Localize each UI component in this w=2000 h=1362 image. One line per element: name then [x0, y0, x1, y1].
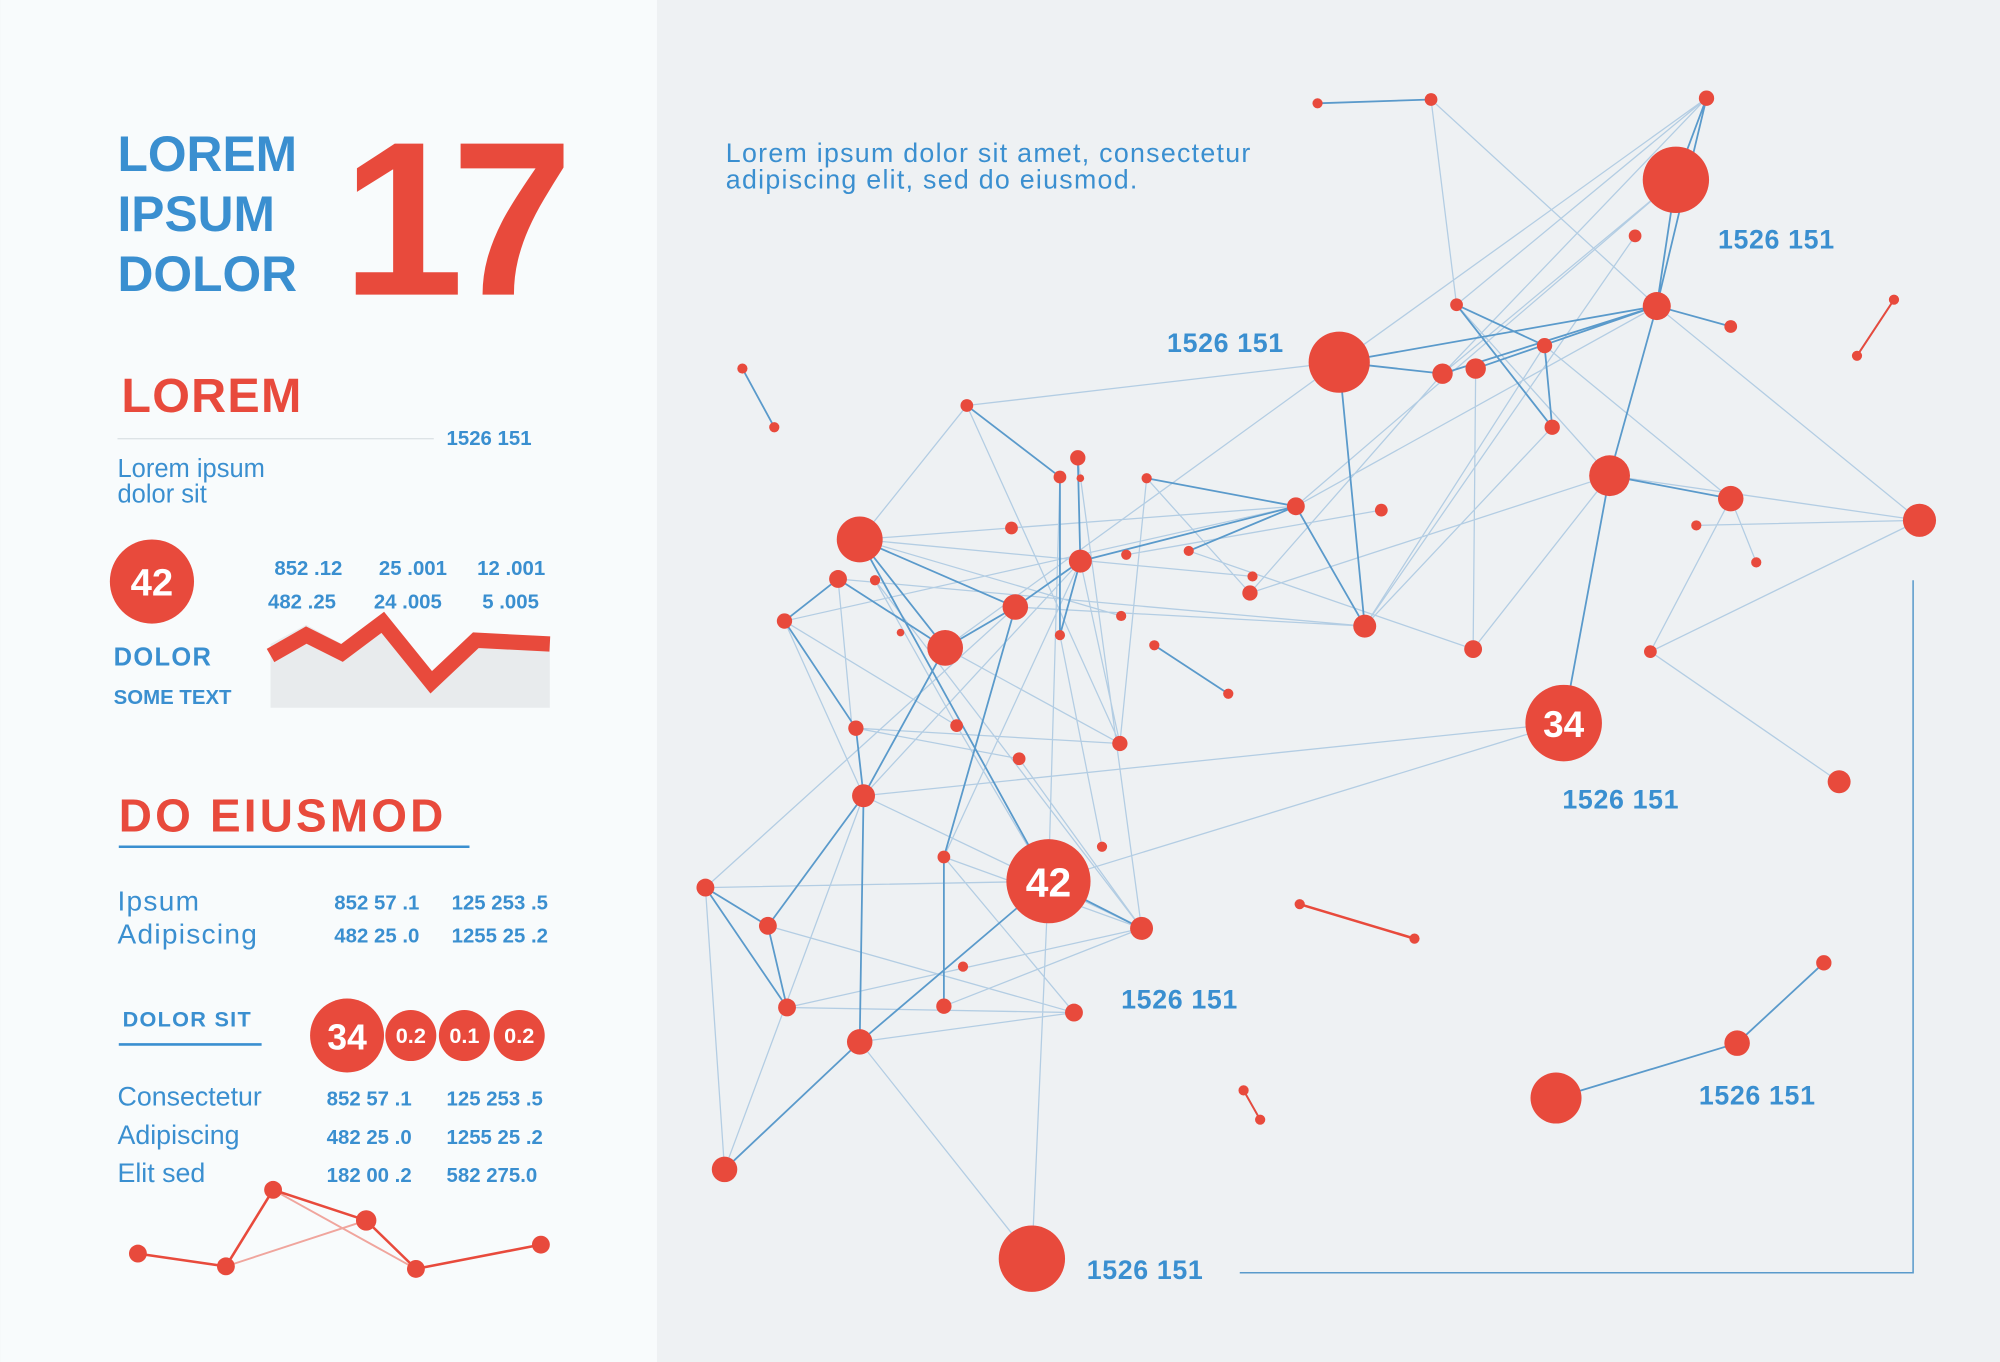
numbers table 3 [327, 1089, 543, 1187]
panel: left sidebar [0, 0, 657, 1362]
numbers table 2 [334, 892, 548, 947]
numbers table 2: 1255 25 .2 [452, 925, 548, 947]
badge: 42 [1006, 839, 1091, 923]
numbers table 3: 482 25 .0 [327, 1127, 412, 1149]
numbers table 3: 182 00 .2 [327, 1165, 412, 1187]
numbers table 1: 5 .005 [482, 591, 539, 613]
node value labels: 1526 151 [1167, 328, 1284, 358]
line chart [129, 1181, 550, 1278]
text block: consectetur list [118, 1082, 262, 1188]
heading: do eiusmod: DO EIUSMOD [119, 789, 447, 841]
node value labels: 1526 151 [1121, 985, 1238, 1015]
numbers table 1: 12 .001 [477, 558, 545, 580]
label: dolor some text [114, 644, 232, 709]
numbers table 2: 852 57 .1 [334, 892, 419, 914]
text block: intro [726, 138, 1252, 195]
node value labels: 1526 151 [1718, 225, 1835, 255]
title: DOLOR [118, 246, 297, 302]
title [118, 126, 297, 302]
numbers table 3: 1255 25 .2 [447, 1127, 543, 1149]
text block: consectetur list: Elit sed [118, 1158, 205, 1188]
badges row: 0.1 [449, 1023, 479, 1048]
area chart [271, 616, 550, 708]
numbers table 1: 482 .25 [268, 591, 336, 613]
badges row: 0.2 [396, 1023, 426, 1048]
numbers table 1: 25 .001 [379, 558, 447, 580]
node value labels: 1526 151 [1087, 1255, 1203, 1285]
bracket line [1240, 580, 1913, 1273]
node value labels [1087, 225, 1835, 1285]
label: dolor some text: DOLOR [114, 644, 212, 672]
node value labels: 1526 151 [1562, 785, 1679, 815]
big number 17: 17 [342, 97, 564, 342]
label: dolor sit: DOLOR SIT [123, 1007, 252, 1032]
badges row [310, 999, 545, 1073]
numbers table 3: 582 275.0 [447, 1165, 537, 1187]
text block: consectetur list: Adipiscing [118, 1120, 240, 1150]
numbers table 3: 852 57 .1 [327, 1089, 412, 1111]
badges row: 0.2 [504, 1023, 534, 1048]
title: LOREM [118, 126, 297, 182]
numbers table 1: 24 .005 [374, 591, 442, 613]
value label: 1526 151 [447, 428, 532, 450]
numbers table 2: 125 253 .5 [452, 892, 548, 914]
badge: 42: 42 [1026, 860, 1071, 906]
node value labels: 1526 151 [1699, 1080, 1816, 1110]
text block: ipsum adipiscing: Adipiscing [118, 919, 258, 950]
badge: 34 [1525, 685, 1602, 761]
text block: ipsum adipiscing: Ipsum [118, 886, 200, 917]
heading: lorem: LOREM [121, 369, 303, 423]
badges row: 34 [327, 1018, 367, 1058]
badge: 34: 34 [1543, 704, 1585, 745]
badge: 42 [110, 539, 194, 624]
numbers table 3: 125 253 .5 [447, 1089, 543, 1111]
text block: consectetur list: Consectetur [118, 1082, 262, 1112]
badge: 42: 42 [131, 562, 173, 605]
text block: lorem ipsum: Lorem ipsum [118, 455, 265, 483]
numbers table 1 [268, 558, 545, 613]
network chart [696, 91, 1936, 1292]
numbers table 2: 482 25 .0 [334, 925, 419, 947]
title: IPSUM [118, 186, 275, 242]
text block: intro: Lorem ipsum dolor sit amet, consectetur [726, 138, 1252, 168]
text block: lorem ipsum: dolor sit [118, 480, 207, 508]
label: dolor some text: SOME TEXT [114, 687, 232, 709]
text block: intro: adipiscing elit, sed do eiusmod. [726, 165, 1139, 195]
text block: ipsum adipiscing [118, 886, 258, 950]
text block: lorem ipsum [118, 455, 265, 508]
numbers table 1: 852 .12 [274, 558, 342, 580]
